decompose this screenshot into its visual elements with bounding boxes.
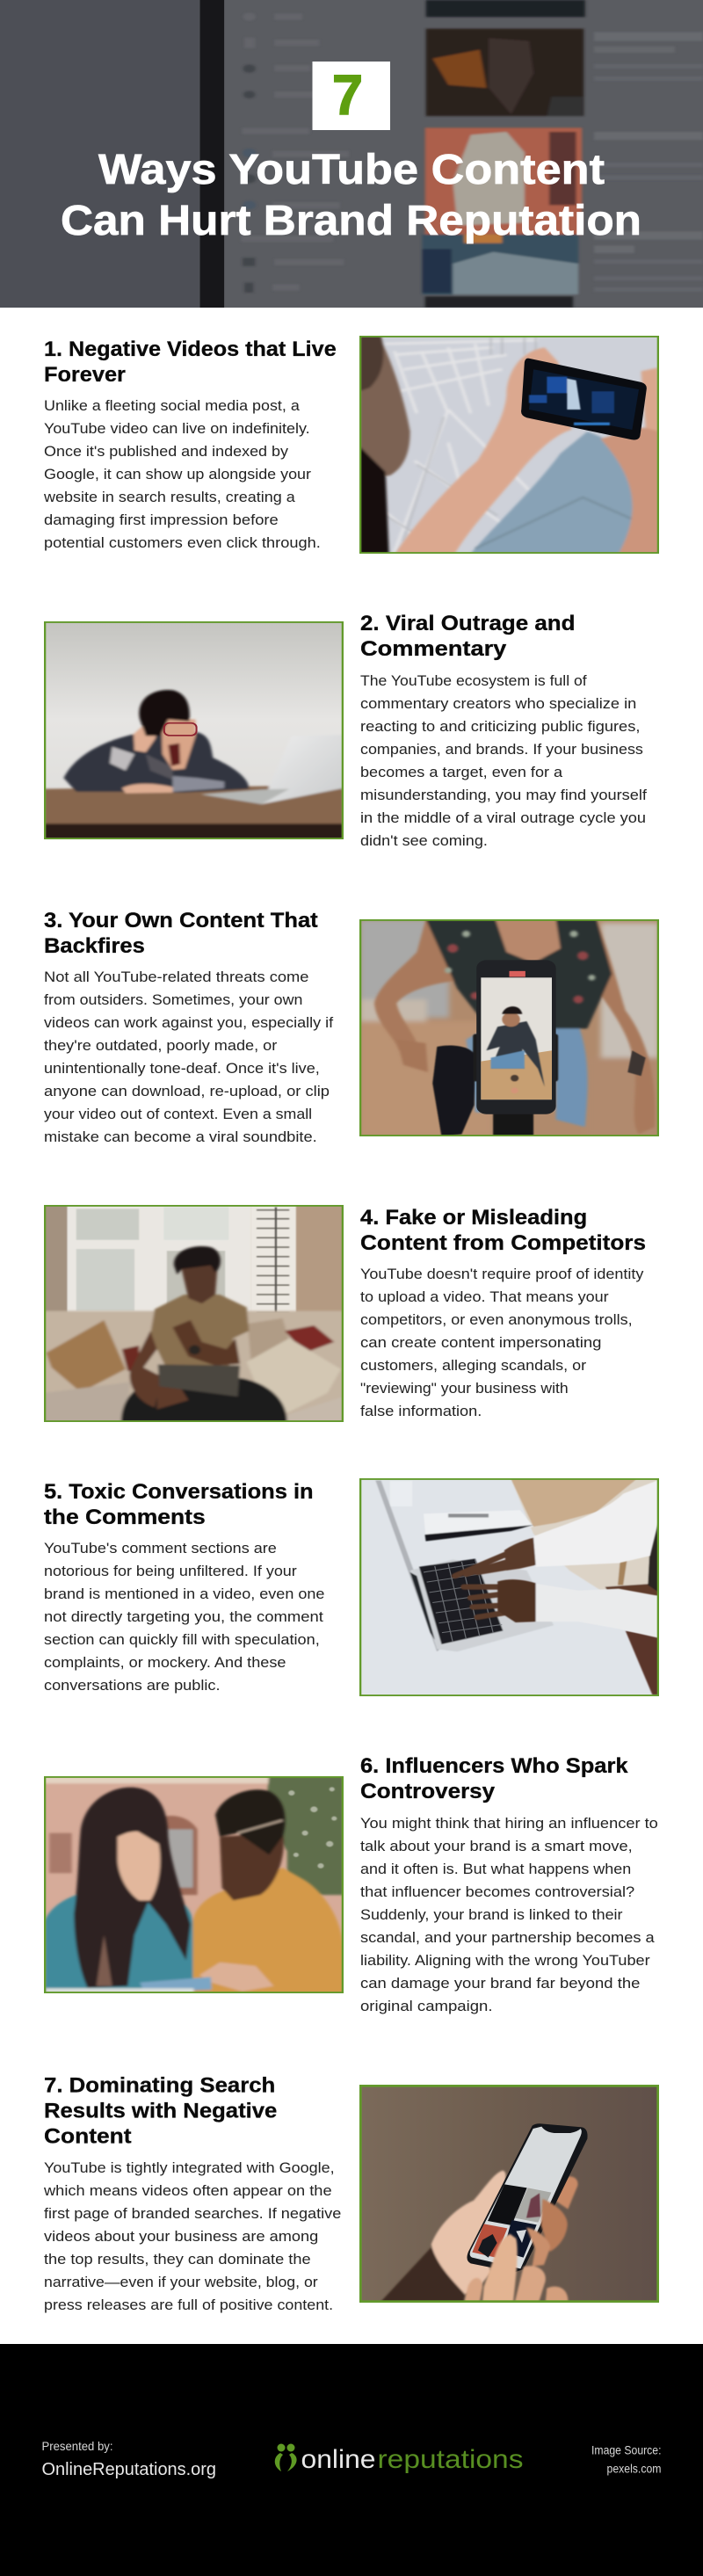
body text 1: Unlike a fleeting social media post, a	[44, 398, 301, 414]
heading 7	[44, 2074, 277, 2148]
body text 4: to upload a video. That means your	[360, 1289, 609, 1305]
body text 6: Suddenly, your brand is linked to their	[360, 1907, 623, 1923]
body text 1: YouTube video can live on indefinitely.	[44, 421, 310, 437]
body text 4: false information.	[360, 1404, 482, 1419]
heading 6	[360, 1754, 628, 1803]
heading 7: Content	[44, 2125, 132, 2148]
photo: hands typing on laptop	[359, 1478, 659, 1696]
heading 4	[360, 1206, 646, 1255]
heading 2: Commentary	[360, 637, 507, 661]
panel: item 2	[44, 612, 647, 849]
image source credit	[591, 2443, 661, 2475]
body text 6: You might think that hiring an influencer to	[360, 1816, 658, 1832]
body text 3: videos can work against you, especially if	[44, 1015, 334, 1031]
body text 2: in the middle of a viral outrage cycle you	[360, 810, 646, 826]
photo: man looking at tablet on sofa	[44, 1205, 344, 1422]
heading 2: 2. Viral Outrage and	[360, 612, 575, 635]
body text 5: notorious for being unfiltered. If your	[44, 1564, 297, 1579]
logo: Online Reputations: online	[301, 2445, 376, 2474]
footer band	[0, 2344, 703, 2576]
photo: man filming himself on phone gimbal	[359, 919, 659, 1136]
panel: item 6	[44, 1754, 658, 2014]
body text 6: talk about your brand is a smart move,	[360, 1839, 633, 1854]
title	[61, 147, 641, 244]
body text 2: companies, and brands. If your business	[360, 742, 643, 758]
body text 6: liability. Aligning with the wrong YouTuber	[360, 1953, 650, 1969]
body text 5	[44, 1541, 324, 1694]
heading 6: Controversy	[360, 1780, 495, 1803]
photo: person watching video on phone	[359, 336, 659, 563]
panel: item 4	[44, 1205, 646, 1422]
body text 5: not directly targeting you, the comment	[44, 1609, 323, 1625]
photo: hand holding smartphone	[359, 2085, 659, 2303]
body text 7	[43, 2160, 341, 2313]
panel: item 7	[43, 2074, 659, 2313]
photo: shouting man at laptop	[44, 621, 344, 839]
heading 7: 7. Dominating Search	[44, 2074, 275, 2097]
body text 7: press releases are full of positive content.	[44, 2297, 333, 2313]
body text 2: The YouTube ecosystem is full of	[360, 673, 587, 689]
body text 3: your video out of context. Even a small	[44, 1107, 312, 1122]
body text 4: "reviewing" your business with	[360, 1381, 569, 1397]
heading 2	[360, 612, 575, 661]
body text 6: that influencer becomes controversial?	[360, 1884, 634, 1900]
body text 1	[43, 398, 321, 551]
panel: item 1	[43, 336, 659, 563]
image source credit: pexels.com	[606, 2461, 661, 2475]
presented by credit	[42, 2439, 216, 2479]
photo: two people looking at a phone	[44, 1776, 344, 1993]
heading 6: 6. Influencers Who Spark	[360, 1754, 628, 1778]
heading 3	[44, 909, 318, 958]
heading 1: Forever	[44, 363, 126, 387]
body text 7: videos about your business are among	[44, 2229, 318, 2245]
number badge: 7	[332, 63, 363, 127]
body text 5: YouTube's comment sections are	[44, 1541, 277, 1556]
body text 4	[360, 1266, 644, 1419]
body text 7: first page of branded searches. If negative	[44, 2206, 341, 2222]
body text 7: narrative—even if your website, blog, or	[44, 2275, 318, 2290]
heading 5: 5. Toxic Conversations in	[44, 1480, 314, 1504]
body text 7: YouTube is tightly integrated with Google,	[44, 2160, 335, 2176]
header banner	[0, 0, 703, 308]
body text 6: original campaign.	[360, 1999, 492, 2014]
body text 3	[44, 969, 334, 1145]
header background: blurred YouTube screenshot	[0, 0, 703, 308]
body text 7: which means videos often appear on the	[43, 2183, 332, 2199]
body text 2: commentary creators who specialize in	[360, 696, 636, 712]
body text 5: conversations are public.	[44, 1678, 221, 1694]
logo: Online Reputations	[275, 2443, 524, 2474]
logo: Online Reputations: reputations	[378, 2445, 524, 2474]
heading 5: the Comments	[44, 1506, 206, 1529]
heading 4: 4. Fake or Misleading	[360, 1206, 587, 1230]
body text 2	[360, 673, 647, 849]
body text 4: competitors, or even anonymous trolls,	[360, 1312, 633, 1328]
number badge	[313, 62, 390, 130]
body text 2: becomes a target, even for a	[360, 765, 563, 780]
body text 5: section can quickly fill with speculation,	[44, 1632, 320, 1648]
body text 3: from outsiders. Sometimes, your own	[44, 992, 302, 1008]
body text 4: YouTube doesn't require proof of identity	[360, 1266, 644, 1282]
image source credit: Image Source:	[591, 2443, 661, 2457]
heading 7: Results with Negative	[44, 2099, 277, 2123]
body text 4: can create content impersonating	[360, 1335, 601, 1351]
body text 1: Once it's published and indexed by	[44, 444, 289, 460]
body text 6	[360, 1816, 658, 2014]
presented by credit: OnlineReputations.org	[42, 2460, 216, 2479]
body text 1: website in search results, creating a	[43, 490, 296, 505]
title: Ways YouTube Content	[98, 147, 605, 193]
logo icon	[275, 2443, 297, 2471]
panel: item 5	[44, 1478, 659, 1696]
heading 4: Content from Competitors	[360, 1231, 646, 1255]
body text 3: anyone can download, re-upload, or clip	[44, 1084, 330, 1099]
body text 5: complaints, or mockery. And these	[44, 1655, 286, 1671]
heading 1	[44, 337, 337, 387]
title: Can Hurt Brand Reputation	[61, 198, 641, 244]
body text 7: the top results, they can dominate the	[44, 2252, 311, 2268]
body text 1: Google, it can show up alongside your	[44, 467, 312, 483]
body text 1: potential customers even click through.	[44, 535, 321, 551]
body text 3: they're outdated, poorly made, or	[44, 1038, 278, 1054]
body text 6: can damage your brand far beyond the	[360, 1976, 640, 1992]
heading 1: 1. Negative Videos that Live	[44, 337, 337, 361]
body text 1: damaging first impression before	[44, 512, 279, 528]
body text 6: and it often is. But what happens when	[360, 1861, 631, 1877]
body text 2: didn't see coming.	[360, 833, 488, 849]
body text 5: brand is mentioned in a video, even one	[44, 1586, 324, 1602]
presented by credit: Presented by:	[42, 2439, 112, 2453]
heading 3: Backfires	[44, 934, 145, 958]
body text 2: misunderstanding, you may find yourself	[360, 787, 647, 803]
body text 3: mistake can become a viral soundbite.	[44, 1129, 317, 1145]
body text 4: customers, alleging scandals, or	[360, 1358, 587, 1374]
heading 5	[44, 1480, 314, 1529]
body text 2: reacting to and criticizing public figures,	[360, 719, 640, 735]
body text 6: scandal, and your partnership becomes a	[360, 1930, 656, 1946]
body text 3: unintentionally tone-deaf. Once it's live,	[44, 1061, 320, 1077]
body text 3: Not all YouTube-related threats come	[44, 969, 309, 985]
heading 3: 3. Your Own Content That	[44, 909, 318, 932]
panel: item 3	[44, 909, 659, 1145]
